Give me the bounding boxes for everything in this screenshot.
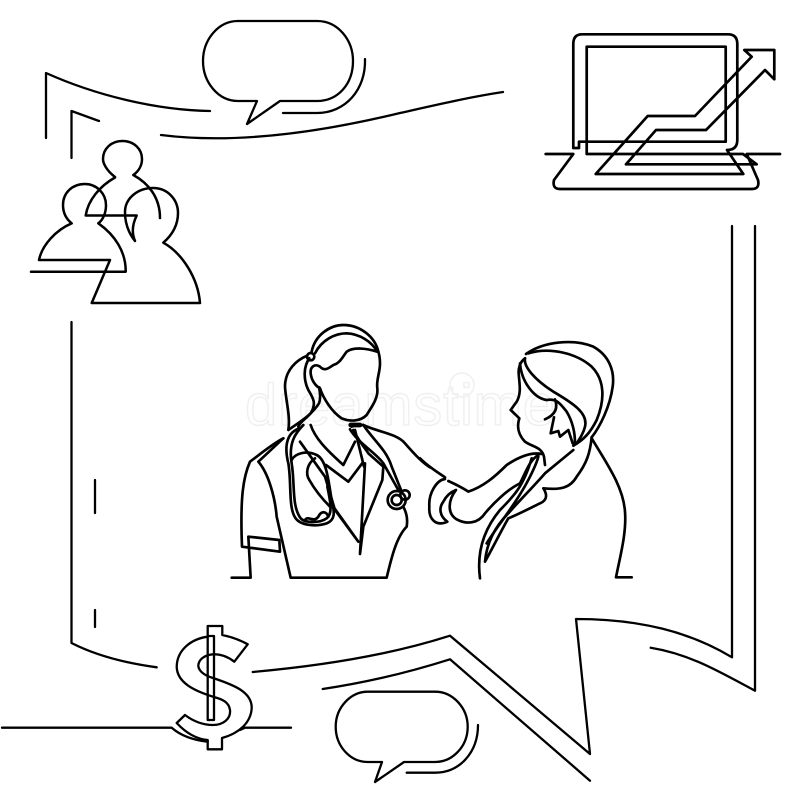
icon: laptop with rising arrow: [546, 34, 780, 189]
frame: short left line: [94, 480, 96, 513]
figure: patient: [420, 342, 632, 578]
frame: short left line lower: [94, 610, 96, 627]
figure: doctor: [232, 325, 430, 578]
icon: group of three people: [31, 141, 200, 303]
frame: top long line: [161, 92, 503, 138]
icon: top speech bubble: [203, 21, 365, 124]
icon: bottom speech bubble: [336, 692, 478, 782]
frame: left vertical line: [72, 322, 157, 667]
frame: outer top-left line: [46, 73, 210, 138]
icon: dollar sign: [2, 626, 291, 749]
frame: inner top-left line: [72, 111, 99, 158]
watermark: dreamstime: [245, 373, 555, 438]
frame: bottom lines and right verticals: [253, 226, 755, 781]
